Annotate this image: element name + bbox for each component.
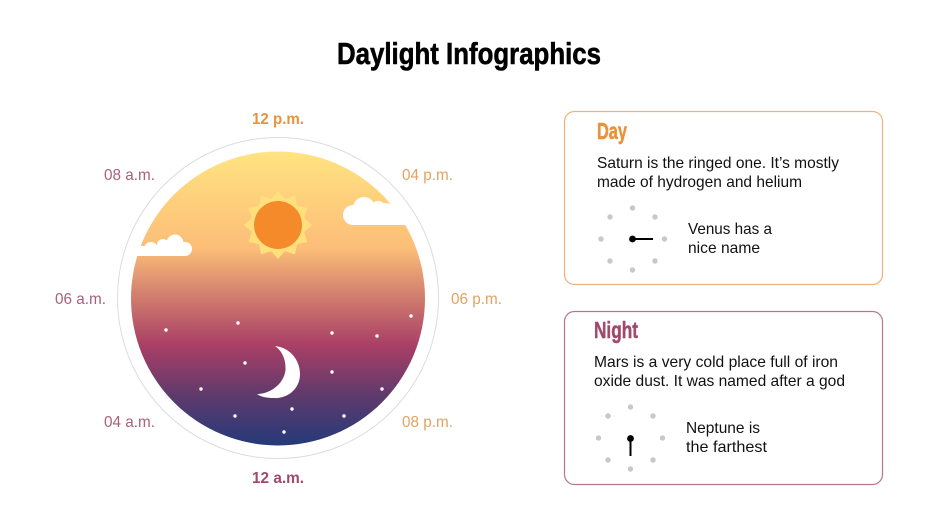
label: 12 a.m.: 12 a.m.	[252, 470, 304, 487]
day card border	[564, 112, 882, 284]
label: 06 p.m.: 06 p.m.	[451, 291, 502, 308]
day clock caption	[688, 221, 772, 257]
icon: night clock	[596, 404, 665, 472]
night description: Mars is a very cold place full of iron	[594, 354, 838, 371]
panel: day	[564, 112, 882, 284]
icon: left cloud	[137, 234, 192, 256]
day description	[597, 155, 839, 191]
panel: night	[564, 312, 882, 484]
night clock caption: the farthest	[686, 439, 768, 456]
title: Daylight Infographics	[337, 36, 601, 71]
icon: moon	[257, 346, 300, 398]
icon: right cloud	[343, 197, 406, 225]
label: 06 a.m.: 06 a.m.	[55, 291, 106, 308]
sky gradient disc	[131, 152, 425, 446]
night card border	[564, 312, 882, 484]
label: 08 a.m.: 08 a.m.	[104, 167, 155, 184]
dial outer ring	[118, 138, 438, 458]
icon: day clock	[598, 205, 667, 273]
night heading: Night	[594, 317, 638, 343]
day clock caption: nice name	[688, 240, 760, 257]
night clock caption	[686, 420, 768, 456]
day description: made of hydrogen and helium	[597, 174, 802, 191]
night description	[594, 354, 845, 390]
label: 12 p.m.: 12 p.m.	[252, 111, 304, 128]
night clock caption: Neptune is	[686, 420, 760, 437]
day clock caption: Venus has a	[688, 221, 772, 238]
chart: daylight clock dial	[118, 138, 438, 458]
day heading: Day	[597, 118, 627, 144]
label: 04 a.m.: 04 a.m.	[104, 414, 155, 431]
stars	[164, 314, 413, 434]
label: 08 p.m.: 08 p.m.	[402, 414, 453, 431]
day description: Saturn is the ringed one. It’s mostly	[597, 155, 839, 172]
label: 04 p.m.: 04 p.m.	[402, 167, 453, 184]
icon: sun	[244, 191, 312, 259]
night description: oxide dust. It was named after a god	[594, 373, 845, 390]
